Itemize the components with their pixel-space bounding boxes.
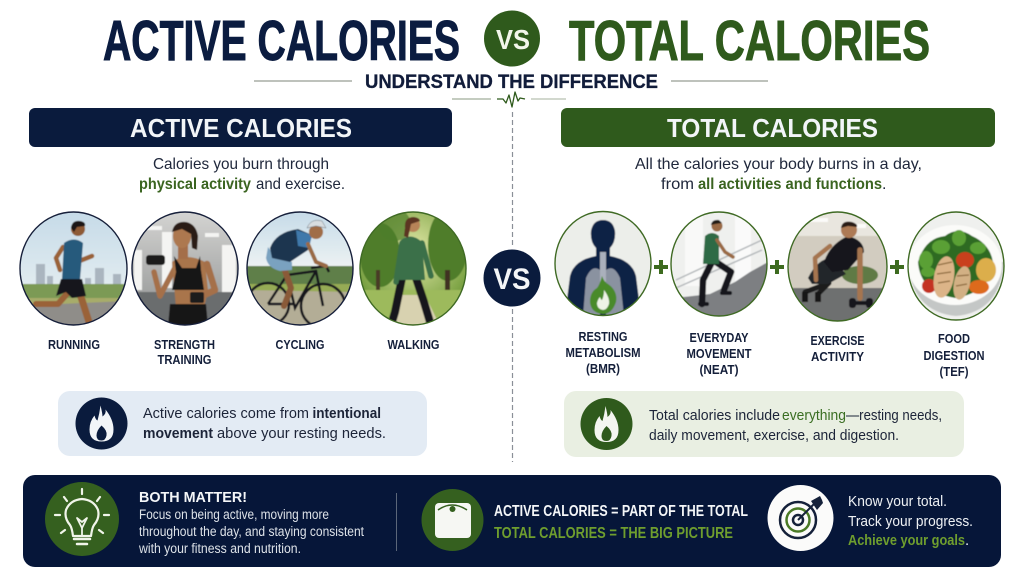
callout: total calories note: —resting needs, [846, 407, 942, 424]
label: resting metabolism: (BMR) [586, 361, 620, 376]
text block: both matter: BOTH MATTER! [139, 489, 247, 506]
icon: light bulb [45, 482, 119, 556]
icon: heartbeat pulse [452, 92, 566, 107]
photo: everyday movement [671, 211, 768, 320]
photo: food digestion [908, 212, 1005, 322]
text block: total definition: . [882, 176, 886, 193]
text block: total definition: all activities and functions [698, 176, 882, 193]
center dashed divider [512, 112, 514, 462]
label: food digestion [924, 331, 984, 379]
photo: cycling [247, 212, 354, 328]
label: everyday movement: MOVEMENT [686, 346, 752, 361]
callout: active calories note: Active calories come from [143, 405, 309, 422]
icon: target [768, 485, 834, 551]
text block: equations: TOTAL CALORIES = THE BIG PICTURE [494, 525, 733, 542]
label: everyday movement: EVERYDAY [690, 330, 749, 345]
text block: goals: Track your progress. [848, 513, 973, 530]
text block: total definition: from [661, 176, 694, 193]
panel: active calories [20, 108, 468, 456]
icon: flame navy [76, 398, 128, 450]
text block: equations [494, 503, 748, 542]
label: food digestion: DIGESTION [924, 348, 984, 363]
label: everyday movement: (NEAT) [700, 362, 738, 377]
callout: total calories note: daily movement, exercise, and digestion. [649, 427, 899, 444]
callout: active calories note: movement [143, 425, 213, 442]
panel: total calories [555, 108, 1005, 457]
plus [890, 260, 904, 274]
text block: active definition [139, 156, 345, 193]
text block: total definition [635, 156, 922, 193]
label: resting metabolism: METABOLISM [566, 345, 640, 360]
label: exercise activity: ACTIVITY [811, 349, 864, 364]
label: strength training: STRENGTH [154, 337, 215, 352]
heading bar: active calories: ACTIVE CALORIES [130, 113, 352, 143]
photo: running [20, 212, 128, 326]
photo: strength training [132, 212, 239, 326]
text block: equations: ACTIVE CALORIES = PART OF THE TOTAL [494, 503, 748, 520]
subtitle: UNDERSTAND THE DIFFERENCE [365, 72, 658, 93]
label: resting metabolism [566, 329, 640, 376]
text block: goals: . [965, 532, 969, 549]
text block: both matter: with your fitness and nutrition. [138, 541, 301, 556]
label: cycling: CYCLING [276, 337, 324, 352]
heading bar: total calories [561, 108, 995, 147]
text block: active definition: and exercise. [256, 176, 345, 193]
label: walking: WALKING [388, 337, 440, 352]
label: exercise activity: EXERCISE [810, 333, 865, 348]
photo: exercise activity [788, 212, 888, 322]
label: everyday movement [686, 330, 752, 377]
text block: goals: Achieve your goals [848, 532, 965, 549]
badge: vs heading: VS [496, 24, 530, 55]
label: exercise activity [810, 333, 865, 364]
text block: goals [848, 493, 973, 549]
label: food digestion: FOOD [938, 331, 970, 346]
title: active calories: ACTIVE CALORIES [103, 9, 460, 73]
photo: resting metabolism [555, 211, 652, 316]
text block: total definition: All the calories your body burns in a day, [635, 156, 922, 173]
label: food digestion: (TEF) [940, 364, 968, 379]
plus [654, 260, 668, 274]
callout: active calories note: intentional [312, 405, 381, 422]
callout: active calories note: above your resting needs. [217, 425, 386, 442]
label: strength training [154, 337, 215, 367]
callout: total calories note: everything [782, 407, 846, 424]
bottom banner [23, 475, 1001, 567]
text block: both matter: throughout the day, and staying consistent [139, 524, 364, 539]
icon: flame green [580, 398, 632, 450]
text block: both matter: Focus on being active, moving more [139, 507, 329, 522]
text block: active definition: physical activity [139, 176, 251, 193]
photo: walking [360, 209, 468, 326]
callout: total calories note [564, 391, 964, 457]
text block: both matter [138, 489, 364, 556]
plus [770, 260, 784, 274]
badge: center vs: VS [494, 263, 530, 296]
heading bar: active calories [29, 108, 452, 147]
label: running: RUNNING [48, 337, 100, 352]
callout: total calories note: Total calories include [649, 407, 780, 424]
label: resting metabolism: RESTING [578, 329, 628, 344]
badge: vs heading [484, 10, 540, 66]
text block: active definition: Calories you burn through [153, 156, 329, 173]
icon: scale [422, 489, 484, 551]
heading bar: total calories: TOTAL CALORIES [667, 113, 878, 143]
badge: center vs [484, 250, 540, 306]
text block: goals: Know your total. [848, 493, 947, 510]
callout: active calories note [58, 391, 427, 456]
label: strength training: TRAINING [158, 352, 212, 367]
